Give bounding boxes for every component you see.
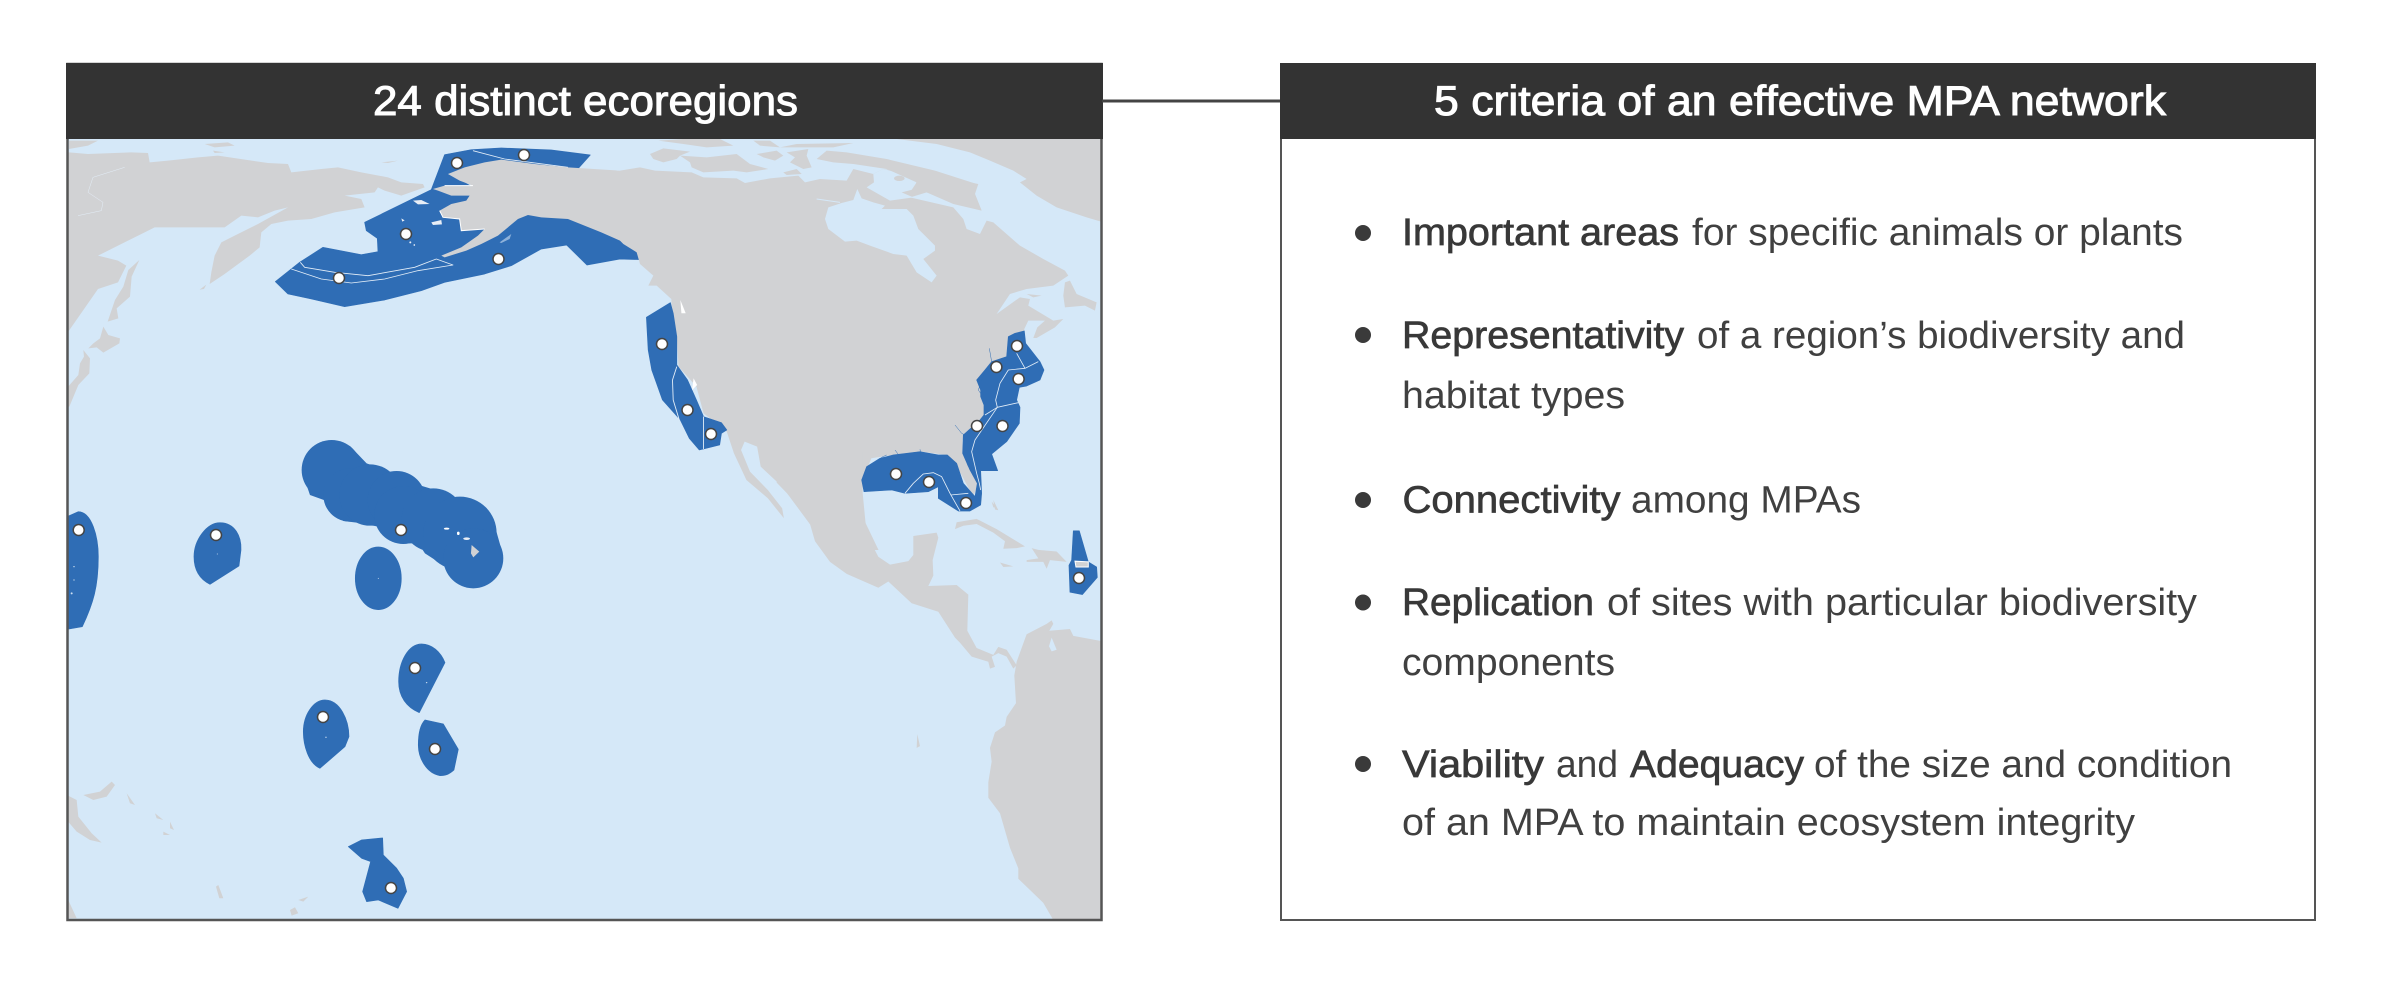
heading bar: ecoregions (66, 63, 1103, 139)
Arctic islands (650, 139, 1097, 311)
east coast and Gulf of Mexico ecoregions (862, 331, 1044, 511)
Pacific island ecoregions (63, 440, 503, 908)
criterion: viability and adequacy: of the size and condition (1814, 744, 2232, 786)
United States land (672, 300, 1008, 550)
Pacific islands (67, 782, 308, 918)
heading bar: criteria (1280, 63, 2316, 139)
Arctic Ocean (617, 139, 978, 184)
Alaska ecoregions, Alaska land and Russia (66, 141, 670, 331)
map (63, 139, 1103, 920)
criterion: replication: Replication (1402, 582, 1594, 624)
Mexico, Central America, Caribbean and South America (777, 452, 1102, 920)
Foxe Basin (867, 169, 917, 201)
panel: ecoregions map (63, 63, 1103, 920)
criterion: viability and adequacy (1355, 744, 2232, 844)
criterion: viability and adequacy: and (1556, 744, 1618, 786)
criterion: important areas (1355, 212, 2183, 254)
criterion: viability and adequacy: Viability (1402, 744, 1544, 786)
criterion: representativity: Representativity (1402, 315, 1684, 357)
criterion: important areas: Important areas (1402, 212, 1679, 254)
heading bar: ecoregions: 24 distinct ecoregions (373, 77, 798, 124)
west coast ecoregions (646, 300, 727, 450)
Canada, Arctic and Greenland (617, 139, 1103, 352)
criterion: representativity: habitat types (1402, 375, 1625, 417)
criterion: connectivity: among MPAs (1631, 480, 1861, 522)
Puerto Rico ecoregion (1069, 531, 1097, 595)
Japan and Sakhalin (67, 260, 139, 407)
Hudson Bay (825, 189, 937, 282)
criterion: replication (1355, 582, 2197, 684)
criterion: important areas: for specific animals or plants (1692, 212, 2183, 254)
criterion: viability and adequacy: Adequacy (1630, 744, 1804, 786)
criterion: replication: of sites with particular biodiversity (1607, 582, 2197, 624)
panel: criteria (1280, 63, 2316, 920)
criterion: representativity: of a region’s biodiversity and (1697, 315, 2185, 357)
criterion: representativity (1355, 315, 2185, 417)
criterion: connectivity: Connectivity (1402, 480, 1620, 522)
Baffin Bay and Labrador Sea (897, 139, 1100, 339)
criterion: connectivity (1355, 480, 1861, 522)
ecoregion markers (73, 150, 1084, 894)
connector line (1102, 100, 1280, 102)
heading bar: criteria: 5 criteria of an effective MPA network (1434, 77, 2167, 124)
criterion: viability and adequacy: of an MPA to maintain ecosystem integrity (1402, 802, 2135, 844)
Baffin Island (817, 151, 982, 211)
criterion: replication: components (1402, 642, 1615, 684)
